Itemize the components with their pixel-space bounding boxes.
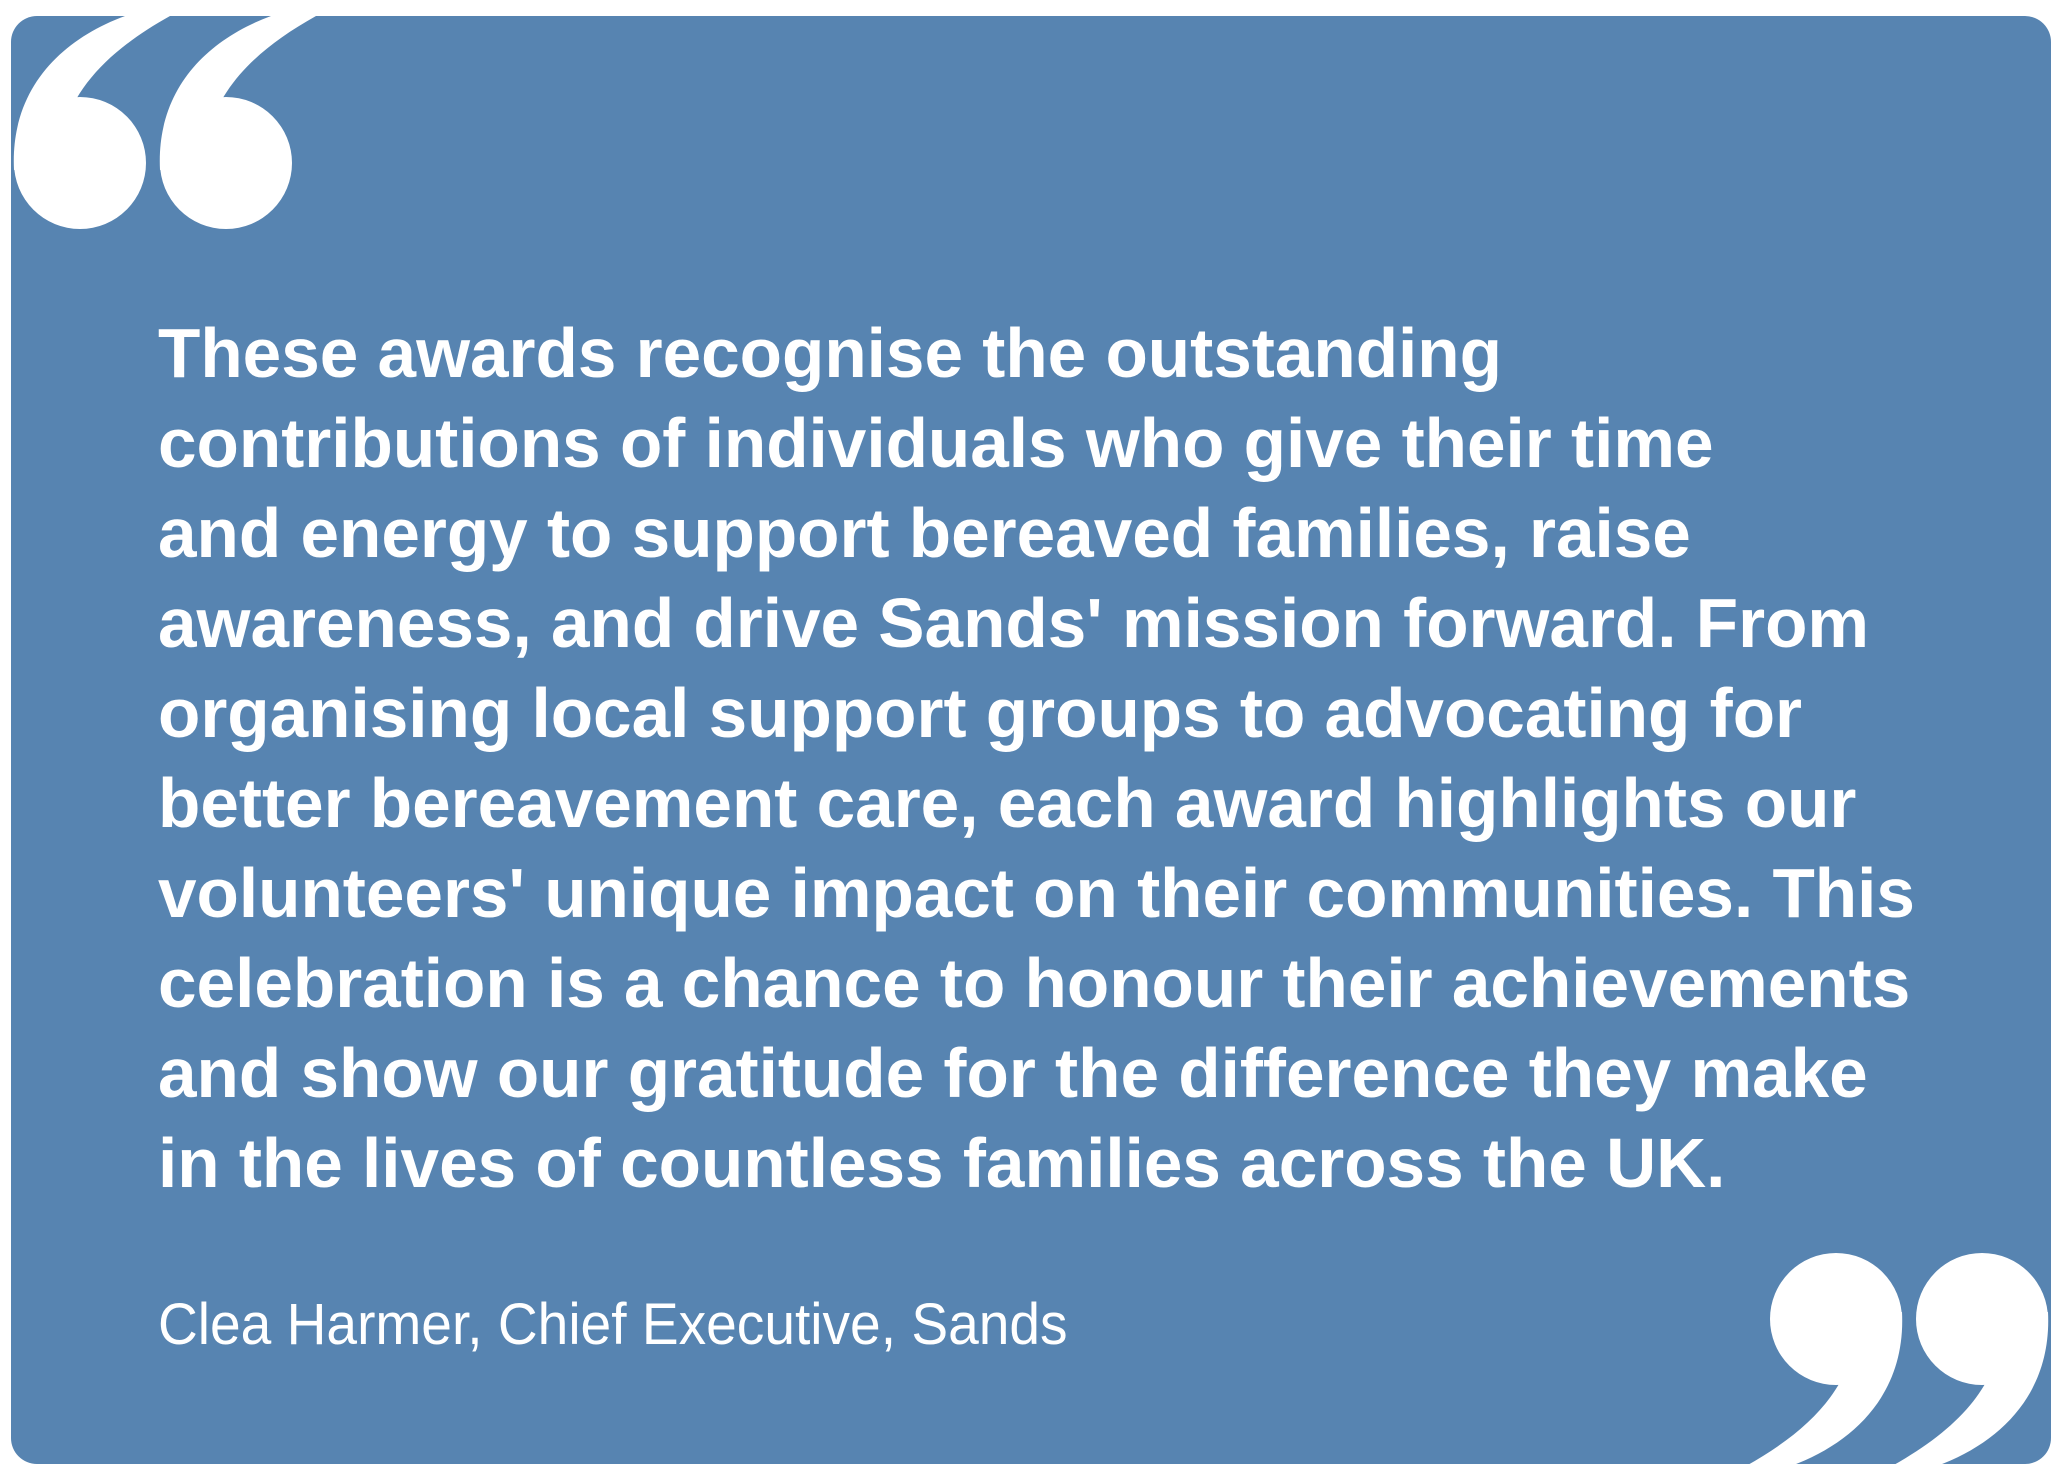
text block: quote: and show our gratitude for the difference they make [158, 1034, 1868, 1112]
icon: closing quote marks [1746, 1253, 2048, 1466]
text block: quote: contributions of individuals who give their time [158, 404, 1714, 482]
text block: attribution: Clea Harmer, Chief Executive, Sands [158, 1292, 1068, 1357]
text block: quote: volunteers' unique impact on their communities. This [158, 854, 1915, 932]
text block: quote: These awards recognise the outstanding [158, 314, 1502, 392]
text block: quote: and energy to support bereaved families, raise [158, 494, 1691, 572]
text block: quote: awareness, and drive Sands' mission forward. From [158, 584, 1869, 662]
text block: quote [158, 314, 1915, 1202]
text block: quote: celebration is a chance to honour their achievements [158, 944, 1910, 1022]
text block: quote: better bereavement care, each award highlights our [158, 764, 1856, 842]
icon: opening quote marks [14, 16, 316, 229]
text block: quote: organising local support groups to advocating for [158, 674, 1802, 752]
text block: quote: in the lives of countless families across the UK. [158, 1124, 1725, 1202]
